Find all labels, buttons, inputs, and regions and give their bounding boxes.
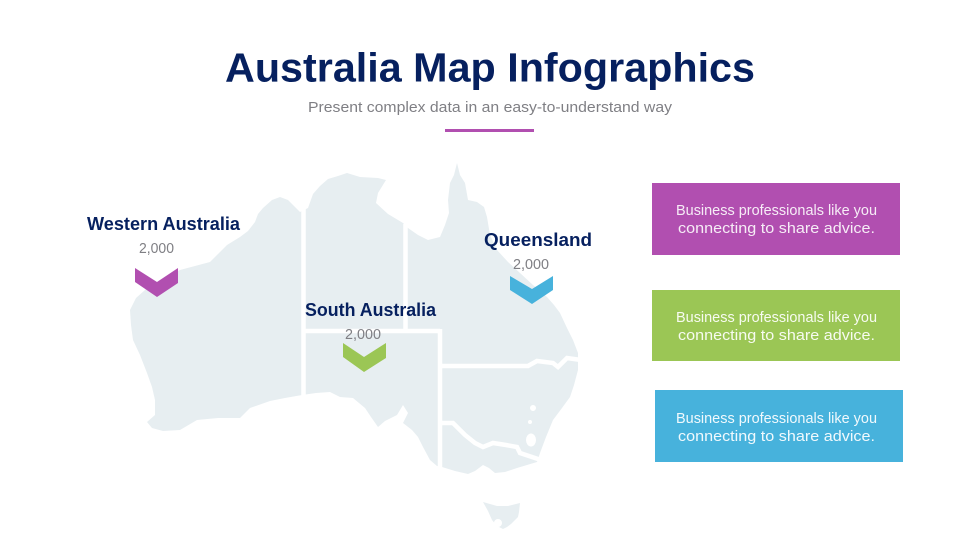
callout: South Australia [305, 299, 437, 372]
title underline [445, 129, 534, 132]
title: Australia Map Infographics [225, 44, 755, 90]
map: Tasmania [483, 502, 520, 529]
subtitle: Present complex data in an easy-to-understand way [308, 99, 673, 116]
callout: Western Australia: 2,000 [139, 241, 174, 257]
map: state borders [303, 205, 581, 468]
callout: South Australia: 2,000 [345, 327, 381, 343]
panel: purple text box: connecting to share advice. [678, 221, 875, 237]
panel: blue text box [655, 390, 903, 462]
map of Australia [130, 163, 581, 529]
callout: Queensland: 2,000 [513, 257, 549, 273]
icon: green chevron [343, 343, 386, 372]
map: lakes [494, 405, 536, 527]
panel: green text box: Business professionals like you [676, 310, 877, 326]
panel: blue text box: Business professionals like you [676, 411, 877, 427]
panel: green text box: connecting to share advice. [678, 328, 875, 344]
callout: Queensland: Queensland [484, 229, 592, 250]
callout: Western Australia [87, 213, 241, 297]
panel: purple text box [652, 183, 900, 255]
callout: South Australia: South Australia [305, 299, 437, 320]
panel: green text box [652, 290, 900, 361]
panel: purple text box: Business professionals like you [676, 203, 877, 219]
callout: Western Australia: Western Australia [87, 213, 241, 234]
callout: Queensland [484, 229, 592, 304]
icon: blue chevron [510, 276, 553, 304]
panel: blue text box: connecting to share advice. [678, 429, 875, 445]
icon: purple chevron [135, 268, 178, 297]
